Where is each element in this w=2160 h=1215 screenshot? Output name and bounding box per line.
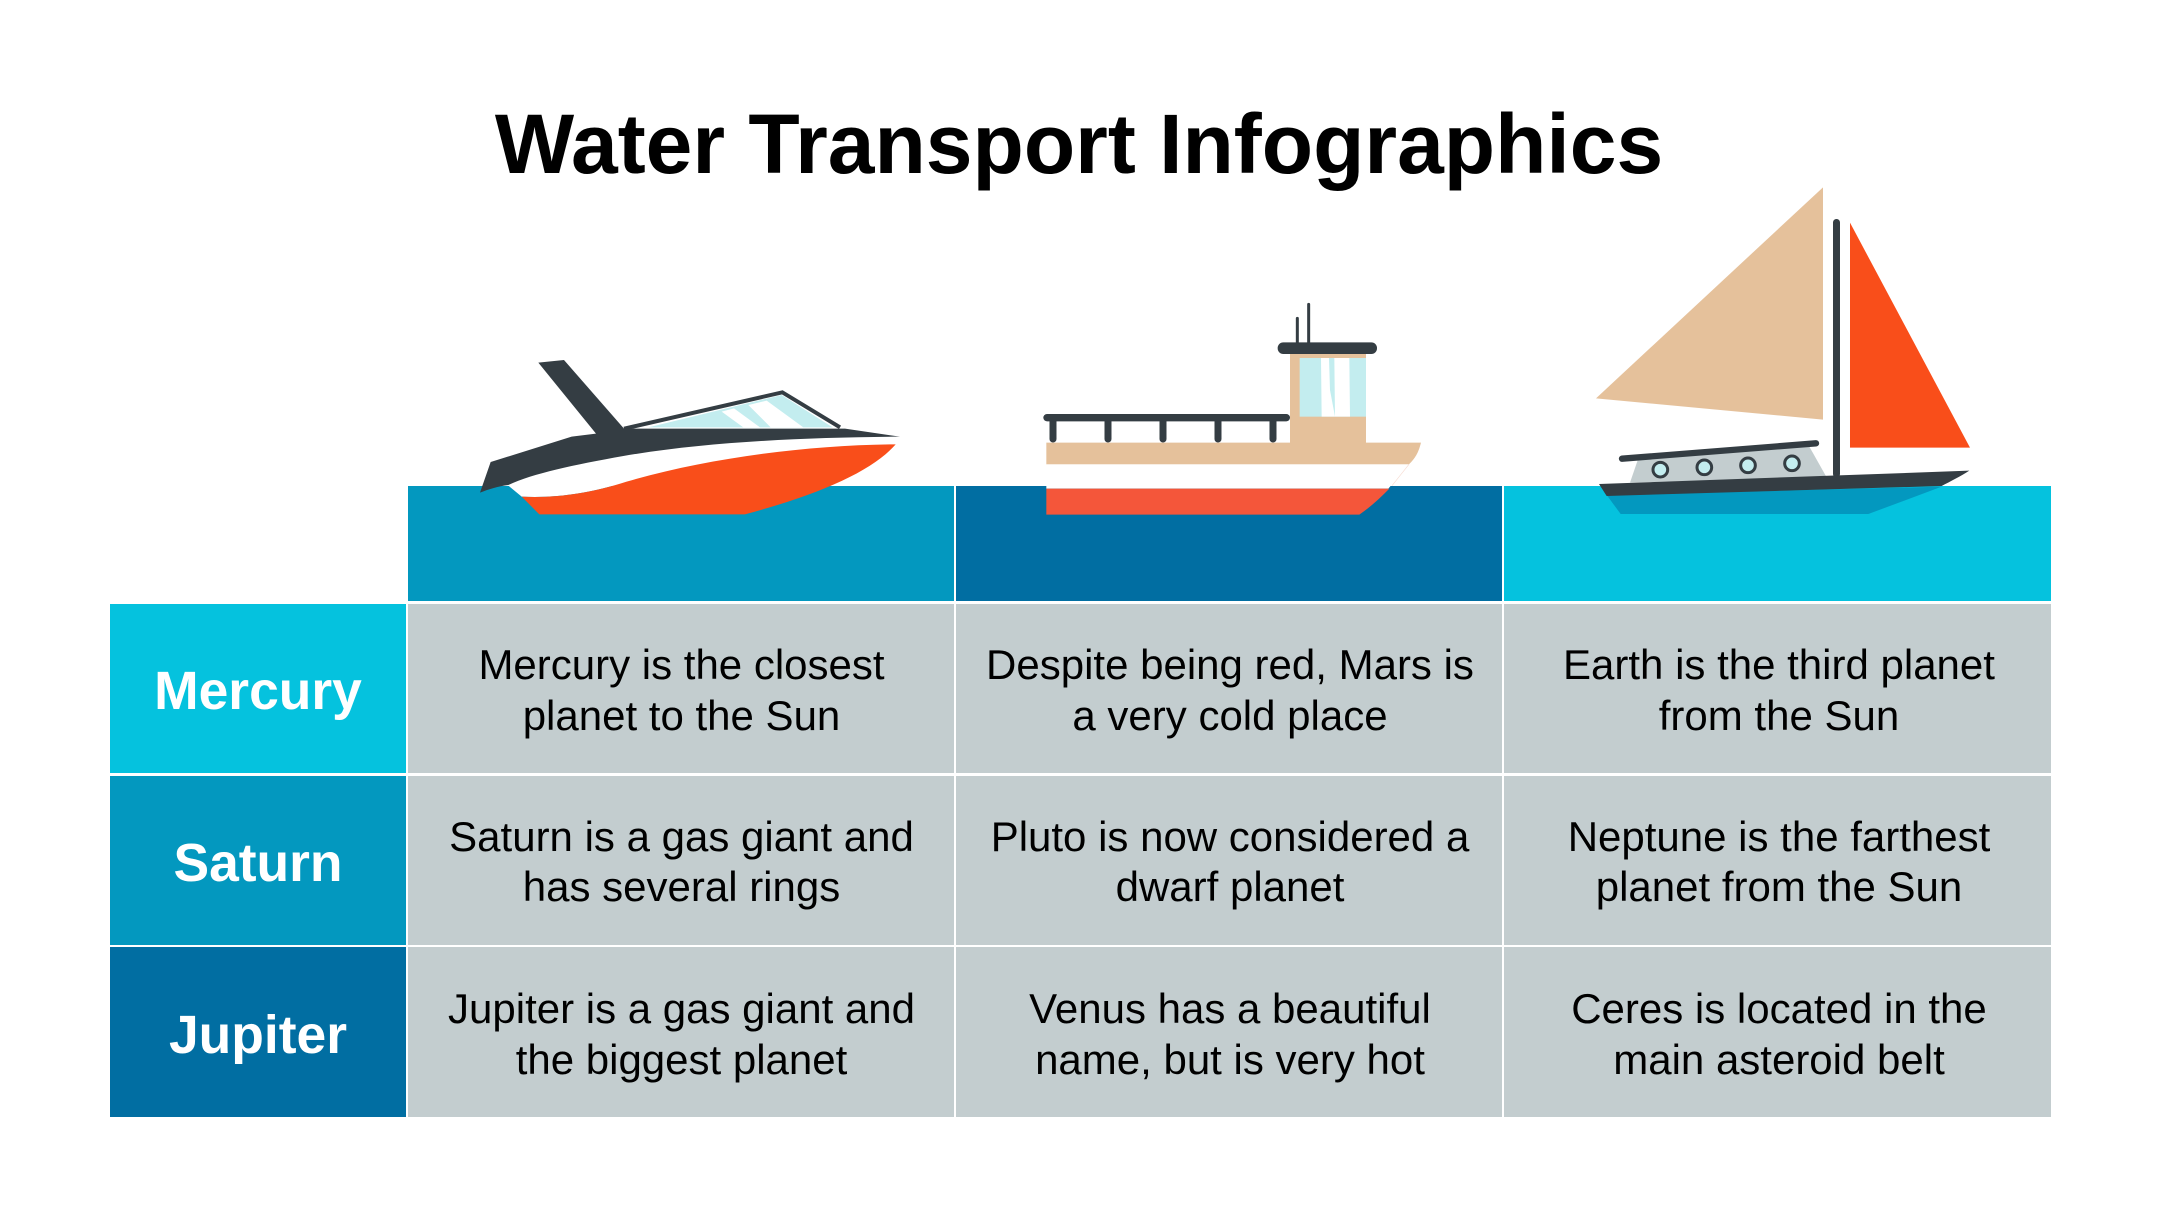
cell: Mercury / ferry: Despite being red, Mars is [986,641,1474,688]
cell: Saturn / sailboat [1504,776,2051,945]
cell: Jupiter / speedboat: the biggest planet [516,1036,848,1083]
cell: Jupiter / sailboat [1504,947,2051,1117]
cell: Jupiter / ferry [956,947,1502,1117]
cell: Mercury / speedboat: Mercury is the closest [478,641,885,688]
cell: Saturn / ferry: dwarf planet [1116,863,1345,910]
cell: Saturn / sailboat: Neptune is the farthest [1568,813,1991,860]
cell: Mercury / sailboat: Earth is the third planet [1563,641,1995,688]
cell: Mercury / sailboat: from the Sun [1659,692,1899,739]
cell: Jupiter / speedboat [408,947,954,1117]
title: Water Transport Infographics [495,97,1663,191]
cell: Jupiter / sailboat: Ceres is located in the [1571,985,1987,1032]
row header: Mercury [110,604,406,773]
row header: Saturn [110,776,406,945]
row header: Mercury: Mercury [154,662,362,721]
cell: Mercury / speedboat: planet to the Sun [523,692,840,739]
cell: Saturn / speedboat: has several rings [523,863,840,910]
cell: Mercury / ferry [956,604,1502,773]
icon: speedboat [480,360,900,514]
cell: Saturn / ferry [956,776,1502,945]
cell: Mercury / speedboat [408,604,954,773]
row header: Jupiter: Jupiter [169,1006,347,1065]
cell: Saturn / speedboat: Saturn is a gas giant and [449,813,914,860]
water band: column 3 [1504,486,2051,601]
cell: Jupiter / ferry: Venus has a beautiful [1029,985,1431,1032]
icon: sailboat [1596,187,1970,514]
icon: ferry ship [1043,304,1421,515]
cell: Saturn / sailboat: planet from the Sun [1596,863,1962,910]
cell: Saturn / speedboat [408,776,954,945]
water band: column 2 [956,486,1502,601]
row header: Jupiter [110,947,406,1117]
row header: Saturn: Saturn [173,834,343,893]
cell: Mercury / ferry: a very cold place [1072,692,1388,739]
cell: Jupiter / sailboat: main asteroid belt [1613,1036,1945,1083]
cell: Saturn / ferry: Pluto is now considered a [991,813,1470,860]
cell: Jupiter / ferry: name, but is very hot [1035,1036,1425,1083]
cell: Mercury / sailboat [1504,604,2051,773]
water band: column 1 [408,486,954,601]
cell: Jupiter / speedboat: Jupiter is a gas giant and [448,985,915,1032]
